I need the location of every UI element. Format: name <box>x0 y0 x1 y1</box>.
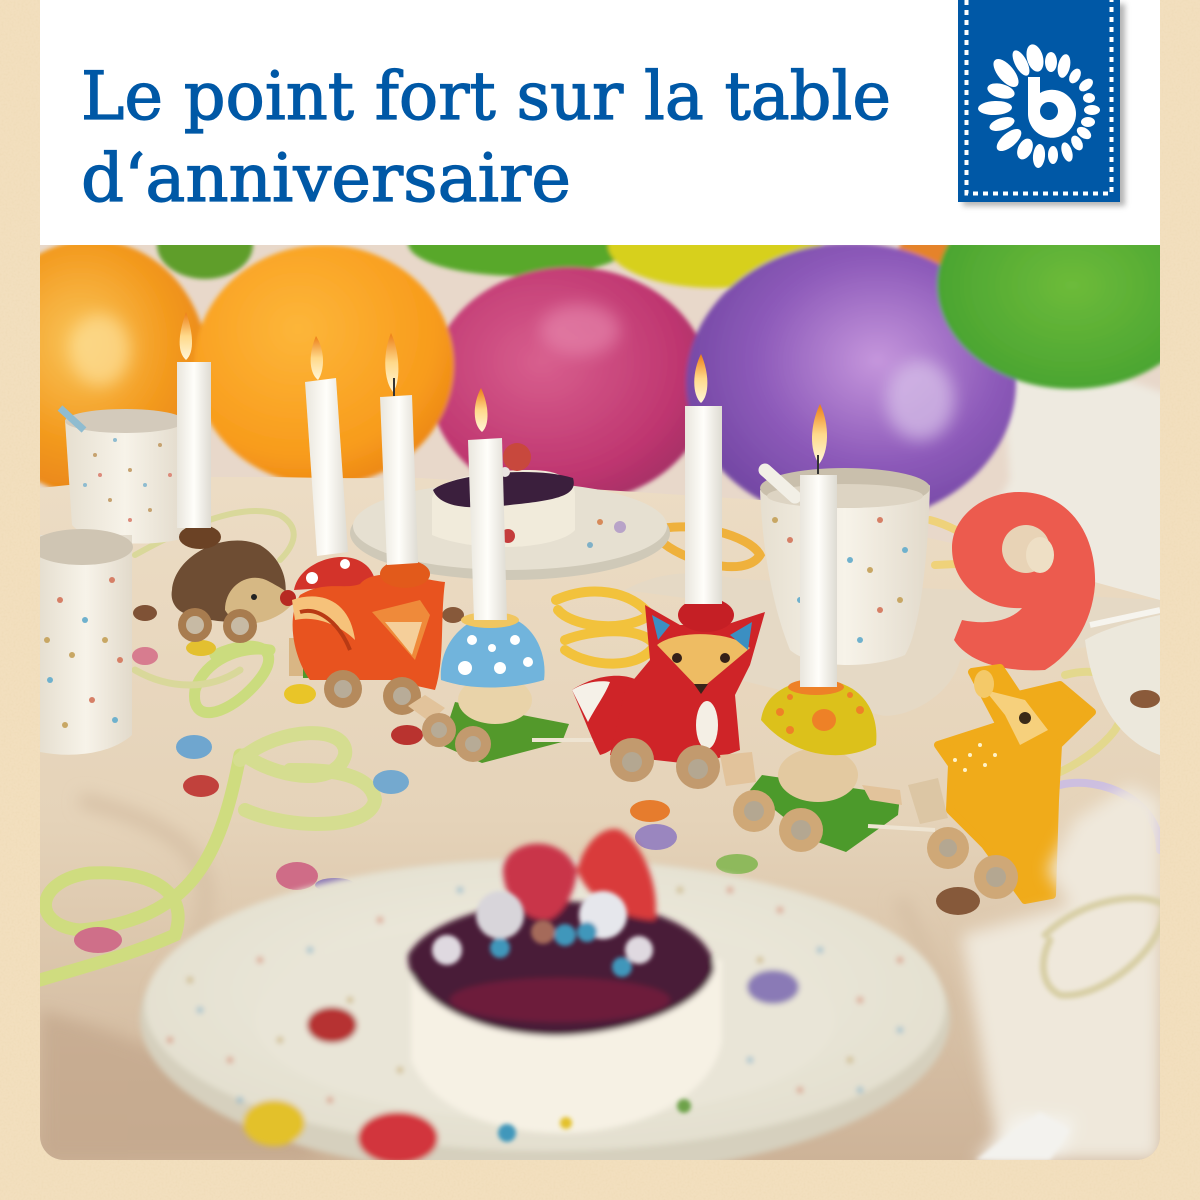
yellow mushroom green car with candle <box>733 679 902 852</box>
cup right <box>760 468 930 665</box>
blue mushroom green car with candle <box>408 612 600 763</box>
red fox car with candle <box>572 598 765 789</box>
foreground plate <box>140 858 950 1178</box>
photo panel: birthday table <box>40 245 1160 1160</box>
back plate with cake <box>350 443 670 580</box>
deer car <box>868 668 1092 900</box>
squirrel-fox orange car with candle <box>292 560 445 715</box>
header panel <box>40 0 1160 245</box>
napkin under fox <box>862 695 934 716</box>
red mushroom behind squirrel <box>289 557 376 678</box>
foreground lilac ribbon <box>1043 898 1165 995</box>
title <box>81 58 891 217</box>
title: d‘anniversaire <box>81 140 571 217</box>
cup left <box>31 529 133 755</box>
napkin foreground right <box>962 785 1160 1160</box>
candle 1 <box>177 312 211 528</box>
candles with flames <box>177 312 837 687</box>
title: Le point fort sur la table <box>81 58 891 135</box>
small plate right <box>1085 610 1160 755</box>
candle 3 <box>380 333 418 565</box>
logo: blue label with flower b <box>958 0 1125 206</box>
ribbons on table <box>40 511 1160 980</box>
candle 5 <box>685 354 722 604</box>
candle 4 <box>468 388 507 620</box>
balloons <box>40 245 1160 510</box>
fork hint <box>975 1116 1055 1160</box>
number nine candle holder <box>952 492 1095 670</box>
foreground cheesecake with berries <box>408 829 722 1142</box>
cup back left <box>60 408 185 544</box>
white blanket backdrop <box>1002 380 1160 600</box>
candle 2 <box>305 336 348 556</box>
candle 6 <box>800 404 837 687</box>
table cloth <box>40 477 1160 1160</box>
smarties candies <box>74 605 1160 953</box>
hedgehog train car with candle <box>172 525 296 643</box>
